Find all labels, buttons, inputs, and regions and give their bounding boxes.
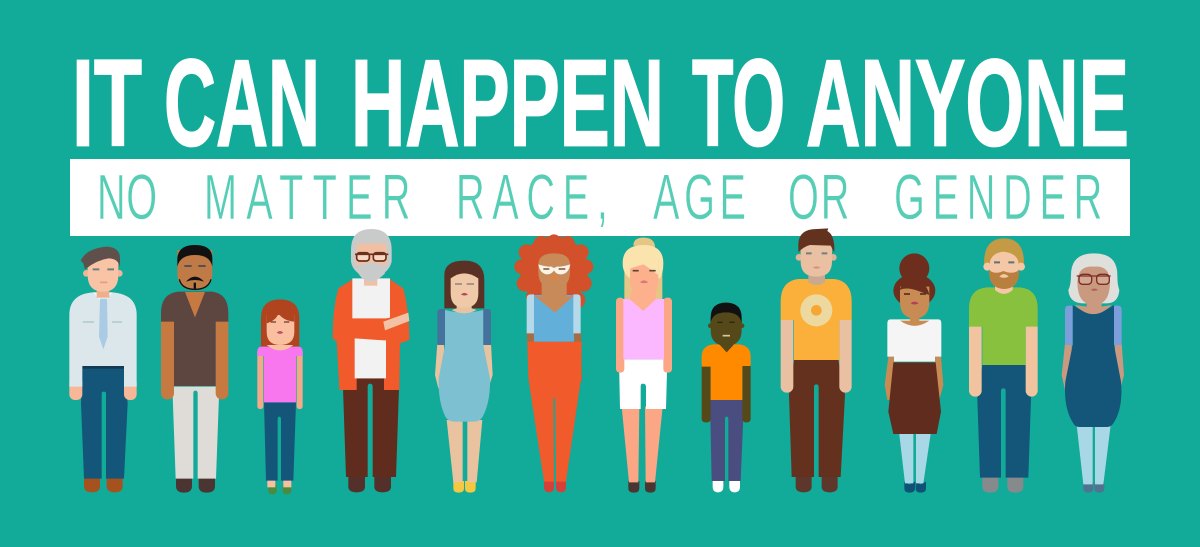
subtitle banner: AGE: [653, 163, 746, 233]
subtitle banner: RACE,: [456, 163, 608, 233]
subtitle banner: GENDER: [894, 163, 1102, 233]
person: man with moustache: [161, 245, 228, 493]
person: tall man in yellow shirt: [781, 228, 852, 492]
title: IT: [72, 36, 142, 172]
subtitle banner: OR: [788, 163, 849, 233]
subtitle banner: [70, 159, 1130, 236]
subtitle banner: NO: [97, 163, 157, 233]
person: old man with arms crossed: [333, 229, 409, 492]
subtitle banner: MATTER: [204, 163, 410, 233]
title: HAPPEN: [351, 36, 664, 172]
person: girl in pink top: [257, 299, 303, 494]
person: blonde woman in pink top: [616, 238, 672, 493]
title: TO: [692, 36, 785, 172]
title: [72, 36, 1129, 172]
person: older woman with glasses: [1062, 253, 1124, 493]
person: woman in blue dress: [435, 261, 493, 493]
person: woman with curly red hair: [514, 234, 593, 492]
person: man in shirt and tie: [69, 247, 137, 492]
person: bearded man in green shirt: [969, 238, 1038, 493]
person: boy in orange shirt: [702, 303, 751, 492]
person: woman with hair bun: [885, 253, 943, 493]
title: CAN: [164, 36, 320, 172]
